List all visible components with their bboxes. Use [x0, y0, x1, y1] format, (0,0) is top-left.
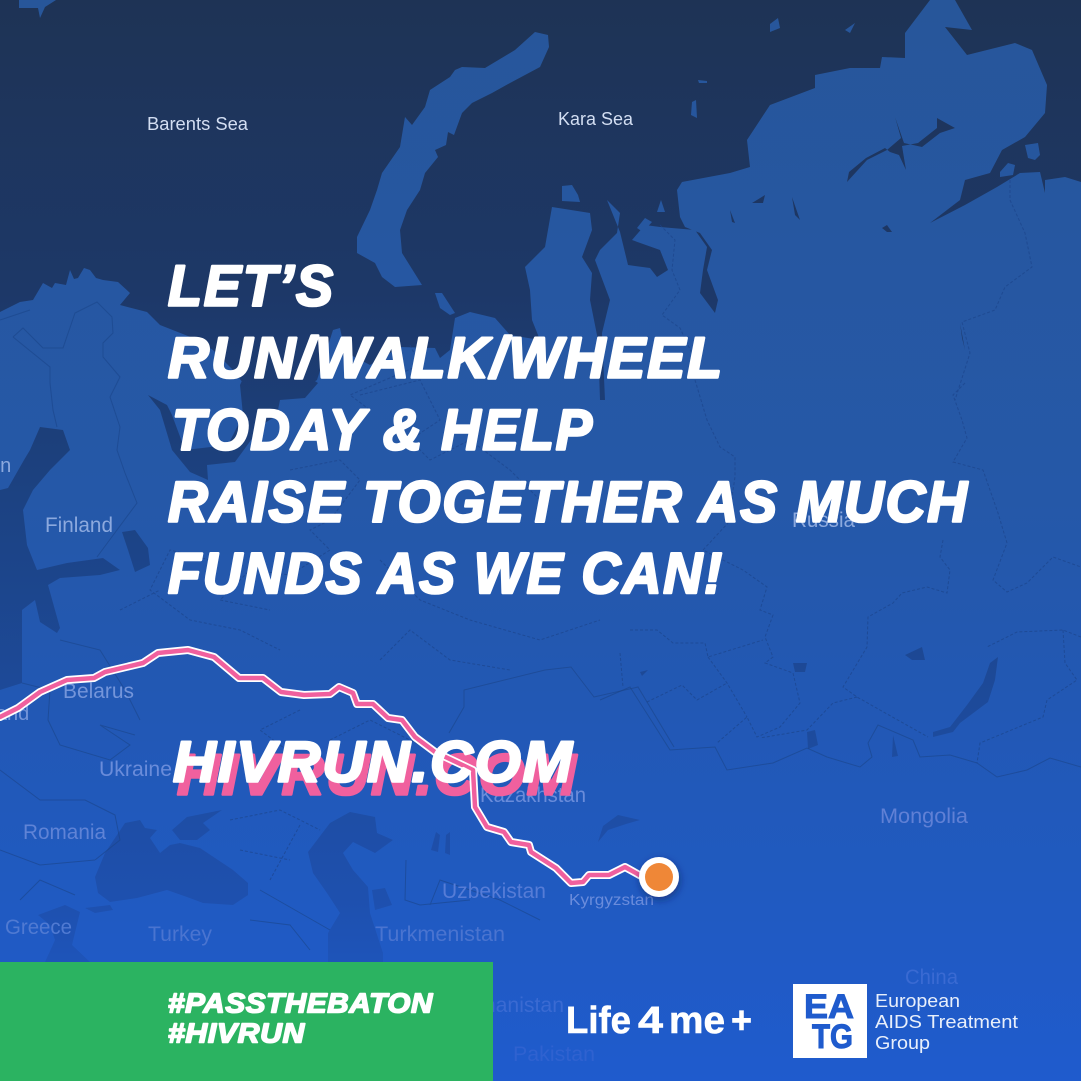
website shadow text: HIVRUN.COM [177, 744, 578, 808]
map: country and sea labels: Russia [792, 509, 855, 532]
map: country and sea labels: Turkmenistan [375, 923, 505, 946]
map: country and sea labels: Finland [45, 514, 113, 537]
logo: Life4me+: Life [566, 1000, 631, 1042]
map: country and sea labels: Turkey [148, 923, 212, 946]
map: country and sea labels: Uzbekistan [442, 880, 546, 903]
map: country and sea labels: China [905, 966, 958, 989]
logo: Life4me+ [566, 1000, 752, 1042]
EATG name: Group [875, 1033, 930, 1053]
EATG name: AIDS Treatment [875, 1012, 1018, 1032]
headline: FUNDS AS WE CAN! [168, 542, 724, 606]
headline: LET’S [168, 254, 335, 318]
headline: TODAY & HELP [172, 398, 594, 462]
map: country and sea labels: Kyrgyzstan [569, 892, 654, 909]
logo: EATG [793, 984, 1018, 1058]
map: country borders [0, 302, 1081, 950]
map: country and sea labels: Pakistan [513, 1043, 595, 1066]
EATG name: European [875, 991, 960, 1011]
logo: Life4me+: 4 [638, 1000, 663, 1042]
map: country and sea labels: Barents Sea [147, 114, 249, 134]
map: country and sea labels: Kara Sea [558, 109, 634, 129]
headline: RUN/WALK/WHEEL [168, 326, 724, 390]
EATG name [875, 991, 1018, 1053]
panel: hashtags [0, 962, 493, 1081]
map: regional dashed borders [120, 180, 1081, 880]
headline [168, 254, 969, 606]
map: country and sea labels: Mongolia [880, 805, 968, 828]
map: country and sea labels [0, 109, 968, 1066]
map: country and sea labels: Kazakhstan [480, 784, 586, 807]
logo: Life4me+: + [731, 1000, 752, 1042]
route line [0, 650, 643, 883]
map: country and sea labels: Greece [5, 916, 72, 939]
website text: HIVRUN.COM [173, 730, 574, 794]
map: inland seas and lakes [0, 117, 998, 962]
map: country and sea labels: Afghanistan [452, 994, 564, 1017]
hashtag text: #PASSTHEBATON [168, 988, 434, 1018]
route end marker [639, 857, 679, 897]
logo: EATG: EA [804, 988, 854, 1026]
hashtag text: #HIVRUN [168, 1018, 306, 1048]
headline: RAISE TOGETHER AS MUCH [168, 470, 969, 534]
map: country and sea labels: Romania [23, 821, 106, 844]
logo: EATG: TG [812, 1018, 853, 1056]
map: country and sea labels: Belarus [63, 680, 134, 703]
logo: Life4me+: me [669, 1000, 725, 1042]
map: country and sea labels: Ukraine [99, 758, 172, 781]
hashtag text [168, 988, 434, 1048]
